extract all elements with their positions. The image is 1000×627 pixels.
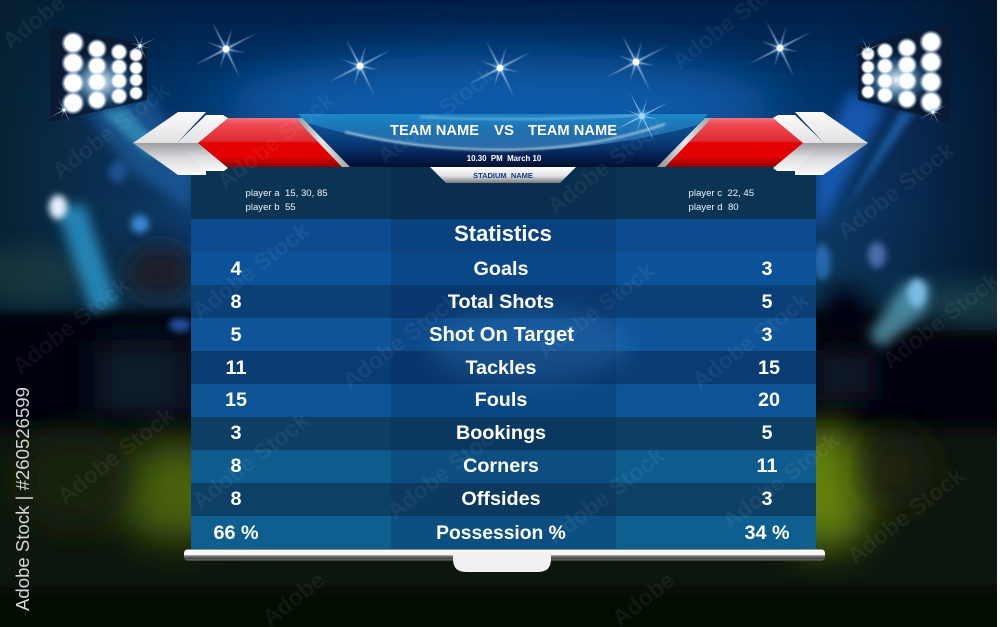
row: Total Shots: Total Shots [448, 291, 554, 313]
row: Possession: 66 % [213, 522, 259, 544]
watermarks: Adobe Stock [542, 442, 669, 549]
watermarks: Adobe Stock [52, 402, 179, 509]
watermarks: Adobe Stock [47, 77, 174, 184]
match date and time: 10.30 PM March 10 [467, 154, 542, 163]
row: Tackles: 11 [226, 357, 246, 379]
watermarks: Adobe Stock [532, 257, 659, 364]
player scorers right [688, 188, 754, 213]
row: Shot On Target: 3 [761, 324, 773, 346]
watermarks: Adobe Stock [372, 62, 499, 169]
row: Fouls: Fouls [475, 389, 527, 411]
row: Total Shots: 5 [761, 291, 773, 313]
team names: VS [494, 122, 514, 139]
row: Offsides [230, 488, 773, 510]
player scorers right: player d 80 [688, 202, 739, 213]
row: Bookings: 5 [761, 422, 773, 444]
row: Shot On Target: Shot On Target [429, 324, 574, 346]
row: Offsides: Offsides [461, 488, 541, 510]
watermarks: Adobe Stock [832, 137, 959, 244]
stadium name plate: STADIUM NAME [473, 171, 533, 180]
banner: right wing [657, 112, 868, 175]
banner: centre title [298, 93, 708, 167]
heading: Statistics: Statistics [454, 221, 552, 246]
row: Possession: Possession % [436, 523, 566, 544]
icon: left floodlight [50, 27, 156, 123]
bottom bar with tab [184, 550, 825, 572]
player scorers right: player c 22, 45 [688, 188, 754, 199]
player scorers left: player b 55 [246, 202, 296, 213]
team names [390, 122, 617, 139]
watermarks: Adobe Stock [7, 272, 134, 379]
table rows [191, 219, 816, 549]
row: Tackles [226, 357, 780, 379]
table header band [191, 167, 816, 219]
row: Goals: 3 [761, 258, 773, 280]
row: Offsides: 8 [230, 488, 242, 510]
watermarks: Adobe Stock [687, 287, 814, 394]
row: Shot On Target: 5 [230, 324, 242, 346]
watermarks: Adobe Stock [382, 417, 509, 524]
row: Fouls: 20 [758, 389, 780, 411]
watermarks: Adobe Stock [337, 287, 464, 394]
vertical stock id text: Adobe Stock | #260526599 [13, 387, 33, 611]
row: Corners: Corners [463, 455, 539, 477]
row: Shot On Target [230, 324, 773, 346]
row: Fouls [225, 389, 780, 411]
row: Goals: Goals [474, 258, 528, 280]
row: Goals: 4 [230, 258, 242, 280]
icon: sparkle stars [195, 21, 811, 97]
banner: left wing [133, 112, 350, 175]
team names: TEAM NAME [528, 122, 617, 139]
panel: statistics table [191, 167, 816, 549]
right edge strip [997, 0, 1000, 627]
watermarks: Adobe Stock [717, 427, 844, 534]
row: Tackles: 15 [758, 357, 780, 379]
watermarks: Adobe Stock [187, 217, 314, 324]
row: Bookings: Bookings [456, 422, 546, 444]
row: Possession [213, 522, 790, 544]
row: Tackles: Tackles [465, 357, 537, 379]
row: Fouls: 15 [225, 389, 247, 411]
row: Corners: 11 [757, 455, 777, 477]
row: Bookings [230, 422, 773, 444]
row: Goals [230, 258, 773, 280]
row: Bookings: 3 [230, 422, 242, 444]
player scorers left [246, 188, 328, 213]
stadium name plate [430, 167, 576, 183]
watermarks: Adobe Stock [212, 87, 339, 194]
row: Offsides: 3 [761, 488, 773, 510]
player scorers left: player a 15, 30, 85 [246, 188, 328, 199]
watermarks: Adobe Stock [542, 112, 669, 219]
row: Total Shots: 8 [230, 291, 242, 313]
row: Total Shots [230, 291, 773, 313]
watermarks: Adobe Stock [842, 462, 969, 569]
row: Corners: 8 [230, 455, 242, 477]
row: Possession: 34 % [744, 522, 790, 544]
icon: right floodlight [854, 24, 950, 125]
team names: TEAM NAME [390, 122, 479, 139]
row: Corners [230, 455, 777, 477]
watermarks: Adobe Stock [187, 407, 314, 514]
